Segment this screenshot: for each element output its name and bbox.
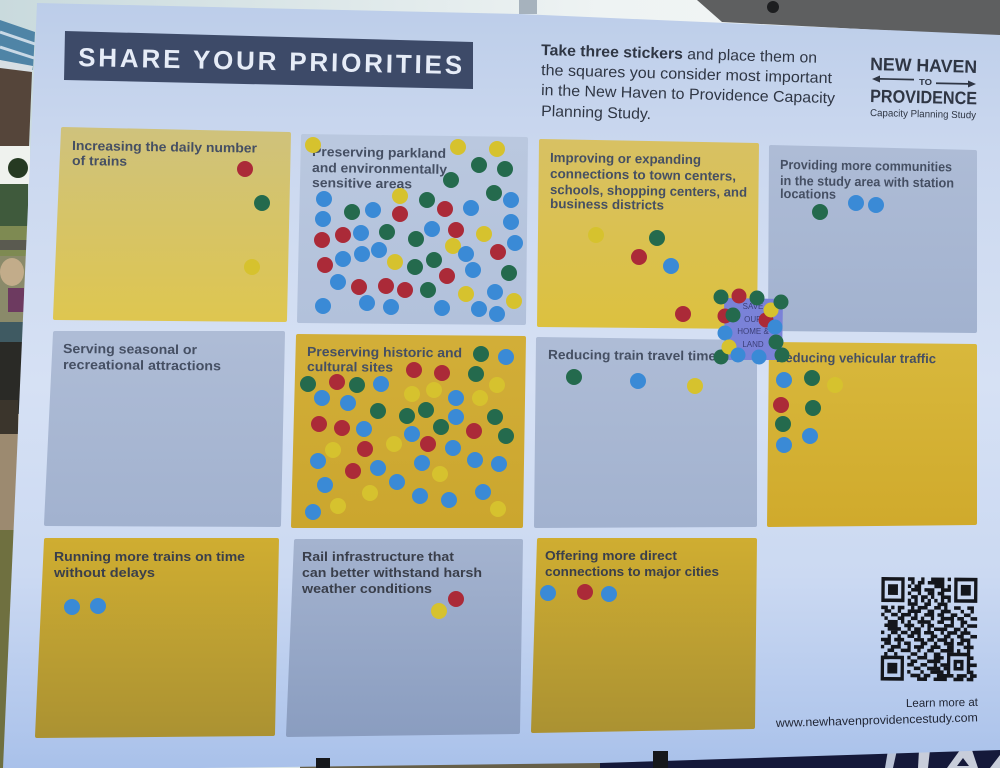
- stickers: historic sites: [300, 346, 514, 520]
- protest note with stickers: LAND: [742, 340, 764, 349]
- protest note with stickers: SAVE: [743, 302, 763, 311]
- panel: improving connections: Improving or expanding: [550, 150, 701, 167]
- panel: more direct connections: Offering more direct: [545, 548, 678, 563]
- stickers: protest cluster: [714, 288, 790, 364]
- panel: preserving historic sites: Preserving historic and: [307, 344, 462, 360]
- panel: more direct connections: [533, 540, 755, 731]
- clips at the bottom of the board: [316, 751, 668, 768]
- stickers: direct connections: [540, 584, 617, 602]
- panel: preserving parkland: Preserving parkland: [312, 144, 446, 161]
- learn more link text: Learn more at: [906, 697, 979, 710]
- title: SHARE YOUR PRIORITIES: [78, 42, 462, 80]
- panel: increasing the daily number of trains: [55, 129, 289, 320]
- stickers: travel times: [566, 369, 703, 394]
- panel: more direct connections: connections to major cities: [545, 564, 719, 579]
- panel: preserving historic sites: cultural sites: [307, 359, 393, 375]
- panel: running more trains on time: without delays: [53, 565, 155, 580]
- protest note with stickers: [714, 288, 790, 364]
- panel: improving connections: business districts: [550, 196, 664, 213]
- panel: serving seasonal attractions: Serving seasonal or: [63, 341, 197, 357]
- protest note with stickers: HOME &: [737, 327, 769, 336]
- instructions text block: [541, 42, 836, 123]
- logo: New Haven to Providence: NEW HAVEN: [870, 54, 977, 77]
- QR code: [881, 579, 977, 680]
- panel: rail infrastructure: [288, 541, 521, 735]
- stickers: communities: [812, 195, 884, 220]
- instructions text block: Planning Study.: [541, 103, 651, 123]
- panel: preserving parkland: [299, 136, 526, 323]
- instructions text block: in the New Haven to Providence Capacity: [541, 82, 836, 107]
- panel: preserving parkland: sensitive areas: [312, 175, 412, 191]
- panel: providing more communities: in the study area with station: [780, 173, 954, 190]
- protest note with stickers: OUR: [744, 315, 762, 324]
- panel: rail infrastructure: Rail infrastructure that: [302, 549, 455, 564]
- panel: improving connections: connections to town centers,: [550, 166, 736, 184]
- panel: reducing vehicular traffic: Reducing vehicular traffic: [776, 350, 936, 366]
- stickers: daily trains: [237, 161, 270, 275]
- panel: rail infrastructure: weather conditions: [301, 581, 432, 596]
- panel: improving connections: schools, shopping centers, and: [550, 182, 747, 200]
- panel: serving seasonal attractions: recreational attractions: [63, 357, 221, 373]
- panel: improving connections: [539, 141, 757, 327]
- stickers: vehicular traffic: [773, 370, 843, 453]
- panel: preserving parkland: and environmentally: [312, 160, 448, 177]
- panel: rail infrastructure: can better withstand harsh: [302, 565, 482, 580]
- learn more link text: [775, 697, 979, 730]
- instructions text block: Take three stickers and place them on: [541, 42, 817, 67]
- panel: increasing the daily number of trains: Increasing the daily number: [72, 138, 257, 156]
- stickers: on time: [64, 598, 106, 615]
- stickers: infrastructure: [431, 591, 464, 619]
- panel: running more trains on time: Running more trains on time: [54, 549, 245, 564]
- stickers: connections: [588, 227, 691, 322]
- panel: serving seasonal attractions: [46, 333, 283, 525]
- instructions text block: the squares you consider most important: [541, 62, 833, 87]
- panel: providing more communities: [770, 147, 975, 331]
- panel: providing more communities: locations: [780, 186, 836, 202]
- panel: increasing the daily number of trains: of trains: [72, 153, 127, 169]
- panel: providing more communities: Providing more communities: [780, 157, 952, 174]
- learn more link text: www.newhavenprovidencestudy.com: [775, 710, 978, 730]
- logo: New Haven to Providence: [870, 54, 977, 121]
- logo: New Haven to Providence: Capacity Planning Study: [870, 108, 976, 121]
- panel: reducing train travel times: [536, 339, 755, 526]
- stickers: parkland: [305, 137, 523, 322]
- title banner: [64, 31, 473, 89]
- logo: New Haven to Providence: TO: [919, 78, 932, 87]
- logo: New Haven to Providence: PROVIDENCE: [870, 86, 977, 108]
- panel: preserving historic sites: [293, 336, 524, 526]
- panel: reducing vehicular traffic: [769, 344, 975, 525]
- panel: running more trains on time: [37, 540, 277, 736]
- panel: reducing train travel times: Reducing train travel time: [548, 347, 716, 363]
